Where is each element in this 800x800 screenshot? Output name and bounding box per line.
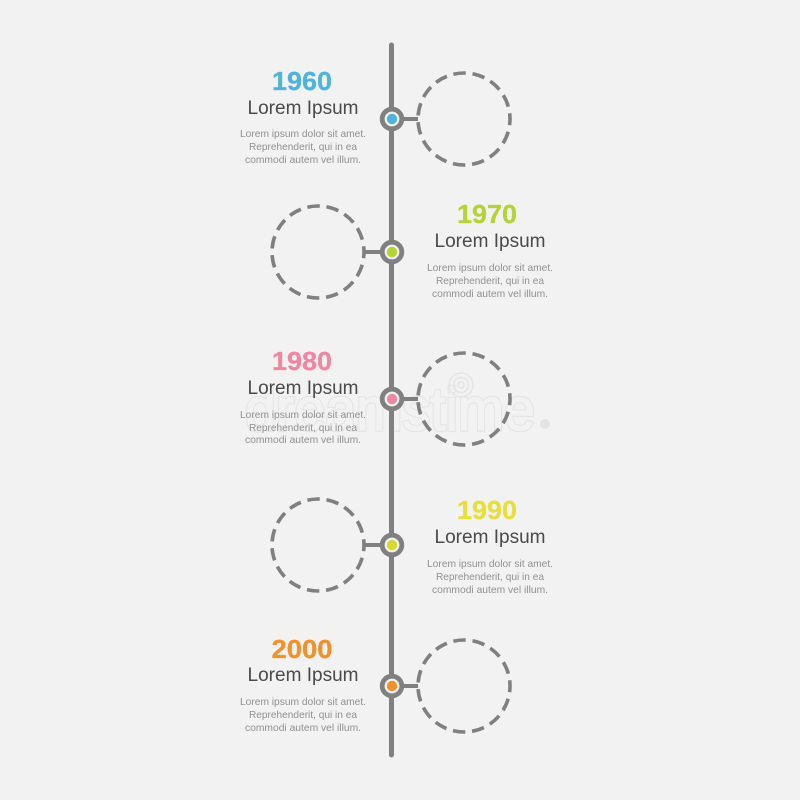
description: Lorem ipsum dolor sit amet.	[240, 129, 366, 140]
year: 1980: 1980	[272, 348, 332, 376]
milestone: 1970	[272, 201, 553, 300]
heading: Lorem Ipsum	[248, 665, 358, 686]
connector	[402, 397, 418, 401]
milestone: 1980	[240, 348, 510, 446]
milestone: 1960	[240, 68, 510, 166]
description	[240, 129, 366, 166]
image placeholder circle	[272, 206, 364, 298]
milestone: 1990	[272, 497, 553, 596]
image placeholder circle	[418, 353, 510, 445]
description: Reprehenderit, qui in ea	[436, 276, 544, 287]
year: 1970: 1970	[457, 201, 517, 229]
year: 1990: 1990	[457, 497, 517, 525]
description: commodi autem vel illum.	[432, 289, 548, 300]
description: Reprehenderit, qui in ea	[249, 423, 357, 434]
image placeholder circle	[272, 499, 364, 591]
image placeholder circle	[418, 640, 510, 732]
connector	[402, 117, 418, 121]
heading: Lorem Ipsum	[434, 527, 546, 548]
timeline node	[382, 676, 402, 696]
timeline node	[382, 242, 402, 262]
description: commodi autem vel illum.	[245, 435, 361, 446]
heading: Lorem Ipsum	[248, 98, 358, 119]
timeline node	[382, 389, 402, 409]
connector	[364, 250, 382, 254]
description: Lorem ipsum dolor sit amet.	[427, 263, 553, 274]
description	[427, 559, 553, 596]
description: Reprehenderit, qui in ea	[249, 710, 357, 721]
connector	[402, 684, 418, 688]
description: Lorem ipsum dolor sit amet.	[427, 559, 553, 570]
year: 1960: 1960	[272, 68, 332, 96]
description: commodi autem vel illum.	[245, 155, 361, 166]
watermark: dreamstime	[245, 376, 535, 443]
timeline node	[382, 535, 402, 555]
heading: Lorem Ipsum	[248, 378, 358, 399]
image placeholder circle	[418, 73, 510, 165]
timeline node	[382, 109, 402, 129]
year: 2000: 2000	[272, 636, 332, 664]
description: Reprehenderit, qui in ea	[249, 142, 357, 153]
description: Reprehenderit, qui in ea	[436, 572, 544, 583]
watermark: dreamstime	[245, 376, 535, 443]
description	[240, 697, 366, 734]
heading: Lorem Ipsum	[434, 231, 546, 252]
description	[427, 263, 553, 300]
description: Lorem ipsum dolor sit amet.	[240, 410, 366, 421]
description: commodi autem vel illum.	[432, 585, 548, 596]
description: Lorem ipsum dolor sit amet.	[240, 697, 366, 708]
description: commodi autem vel illum.	[245, 723, 361, 734]
timeline axis	[389, 45, 394, 755]
description	[240, 410, 366, 446]
connector	[364, 543, 382, 547]
milestone: 2000	[240, 636, 510, 734]
